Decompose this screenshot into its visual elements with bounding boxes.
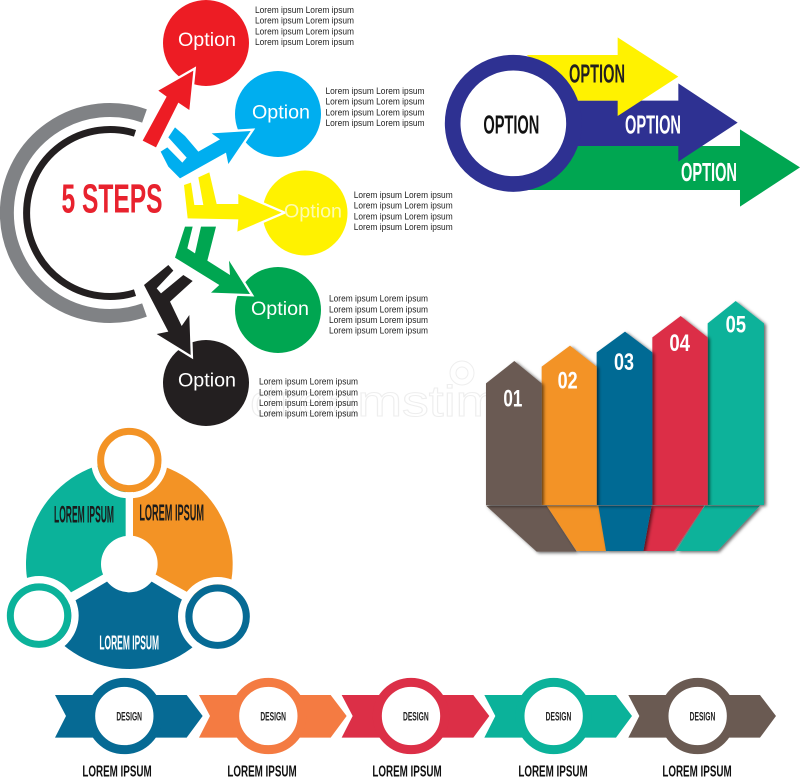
fold: orange bbox=[547, 506, 606, 551]
text block: black: Lorem ipsum Lorem ipsum bbox=[259, 398, 358, 408]
text block: green: Lorem ipsum Lorem ipsum bbox=[329, 326, 428, 336]
label: green option: OPTION bbox=[681, 159, 737, 187]
circle: green bbox=[235, 267, 321, 353]
panel: 5 steps radial diagram bbox=[7, 0, 453, 426]
arrow: green bbox=[527, 129, 800, 207]
circle: yellow bbox=[262, 170, 348, 256]
text block: red bbox=[255, 5, 354, 47]
text block: yellow: Lorem ipsum Lorem ipsum bbox=[354, 190, 453, 200]
bar 05 bbox=[708, 301, 764, 505]
center hole bbox=[101, 536, 158, 592]
inner black arc bbox=[27, 130, 135, 297]
arrow: blue bbox=[161, 127, 251, 178]
text block: black: Lorem ipsum Lorem ipsum bbox=[259, 387, 358, 397]
circle: black bbox=[163, 340, 249, 426]
arrow: yellow bbox=[527, 37, 678, 116]
ring bbox=[453, 63, 574, 184]
text block: red: Lorem ipsum Lorem ipsum bbox=[255, 26, 354, 36]
ribbon 4 bbox=[484, 682, 632, 777]
panel: three part circle: LOREM IPSUM bbox=[139, 499, 204, 525]
ring halo left bbox=[3, 580, 75, 652]
text block: yellow: Lorem ipsum Lorem ipsum bbox=[354, 201, 453, 211]
arrows bbox=[143, 71, 282, 355]
arrow: yellow bbox=[184, 172, 282, 232]
sector: blue bbox=[42, 568, 217, 669]
number 03: 03 bbox=[614, 349, 634, 376]
text block: yellow bbox=[354, 190, 453, 232]
panel: design ribbons bbox=[55, 682, 776, 777]
sector: orange bbox=[133, 461, 233, 611]
number 01: 01 bbox=[503, 386, 522, 413]
text block: yellow: Lorem ipsum Lorem ipsum bbox=[354, 222, 453, 232]
text block: blue: Lorem ipsum Lorem ipsum bbox=[326, 118, 424, 128]
number 02: 02 bbox=[558, 367, 578, 394]
text block: black: Lorem ipsum Lorem ipsum bbox=[259, 409, 358, 419]
panel: three part circle: LOREM IPSUM bbox=[54, 502, 114, 529]
ring: blue bbox=[189, 588, 246, 645]
label: option red: Option bbox=[178, 30, 236, 51]
ribbon 1 bbox=[55, 682, 203, 777]
label: navy option: OPTION bbox=[625, 111, 681, 139]
text block: red: Lorem ipsum Lorem ipsum bbox=[255, 16, 354, 26]
arrow: green bbox=[175, 227, 250, 294]
text block: blue: Lorem ipsum Lorem ipsum bbox=[326, 86, 424, 96]
ribbon 5 bbox=[628, 682, 776, 777]
label: yellow option: OPTION bbox=[569, 61, 625, 89]
panel: option arrows bbox=[453, 37, 800, 207]
ribbon 2 bbox=[199, 682, 347, 777]
label: option yellow: Option bbox=[284, 202, 342, 222]
text block: green: Lorem ipsum Lorem ipsum bbox=[329, 315, 428, 325]
text block: yellow: Lorem ipsum Lorem ipsum bbox=[354, 211, 453, 221]
sector: teal bbox=[26, 461, 126, 611]
text block: green bbox=[329, 294, 428, 336]
panel: three part circle: LOREM IPSUM bbox=[99, 631, 159, 654]
ring: orange bbox=[101, 431, 158, 489]
text block: blue: Lorem ipsum Lorem ipsum bbox=[326, 97, 424, 107]
label: option green: Option bbox=[251, 299, 309, 320]
ribbon 5: DESIGN bbox=[690, 709, 715, 723]
number 04: 04 bbox=[669, 330, 691, 357]
text block: blue bbox=[326, 86, 424, 128]
ribbon 3 bbox=[342, 682, 489, 777]
ring: teal bbox=[10, 587, 68, 644]
watermark bbox=[250, 361, 545, 426]
bar 02 bbox=[542, 346, 597, 505]
ring halo right bbox=[182, 581, 254, 653]
arrow: red bbox=[143, 71, 193, 147]
circle: blue bbox=[235, 71, 321, 157]
circle: red bbox=[163, 0, 249, 86]
text block: black: Lorem ipsum Lorem ipsum bbox=[259, 377, 358, 387]
ribbon 2: DESIGN bbox=[260, 709, 286, 723]
outer gray arc bbox=[7, 110, 145, 316]
text block: red: Lorem ipsum Lorem ipsum bbox=[255, 37, 354, 47]
panel: three part circle bbox=[3, 425, 254, 669]
label: option blue: Option bbox=[252, 102, 310, 124]
fold: brown bbox=[486, 506, 577, 552]
ribbon 4: DESIGN bbox=[546, 709, 571, 723]
text block: red: Lorem ipsum Lorem ipsum bbox=[255, 5, 354, 15]
label: option black: Option bbox=[178, 370, 236, 392]
bar 03 bbox=[597, 332, 652, 505]
ribbon 1: DESIGN bbox=[116, 709, 142, 723]
fold: teal bbox=[676, 506, 760, 551]
bar 04 bbox=[652, 316, 708, 505]
heading: 5 steps: 5 STEPS bbox=[62, 176, 162, 222]
label: ring option: OPTION bbox=[483, 111, 539, 139]
watermark: dreamstime. bbox=[250, 377, 545, 426]
text block: black bbox=[259, 377, 358, 419]
number 05: 05 bbox=[726, 311, 746, 338]
panel: numbered bars bbox=[486, 301, 764, 552]
arrow: navy bbox=[573, 83, 738, 162]
text block: blue: Lorem ipsum Lorem ipsum bbox=[326, 107, 424, 117]
text block: green: Lorem ipsum Lorem ipsum bbox=[329, 304, 428, 314]
fold: red bbox=[643, 506, 704, 551]
arrow: black bbox=[144, 265, 193, 355]
ribbon 3: DESIGN bbox=[403, 709, 429, 723]
text block: green: Lorem ipsum Lorem ipsum bbox=[329, 294, 428, 304]
ring halo top bbox=[94, 425, 165, 495]
bar 01 bbox=[486, 361, 542, 505]
fold: blue bbox=[598, 506, 652, 551]
